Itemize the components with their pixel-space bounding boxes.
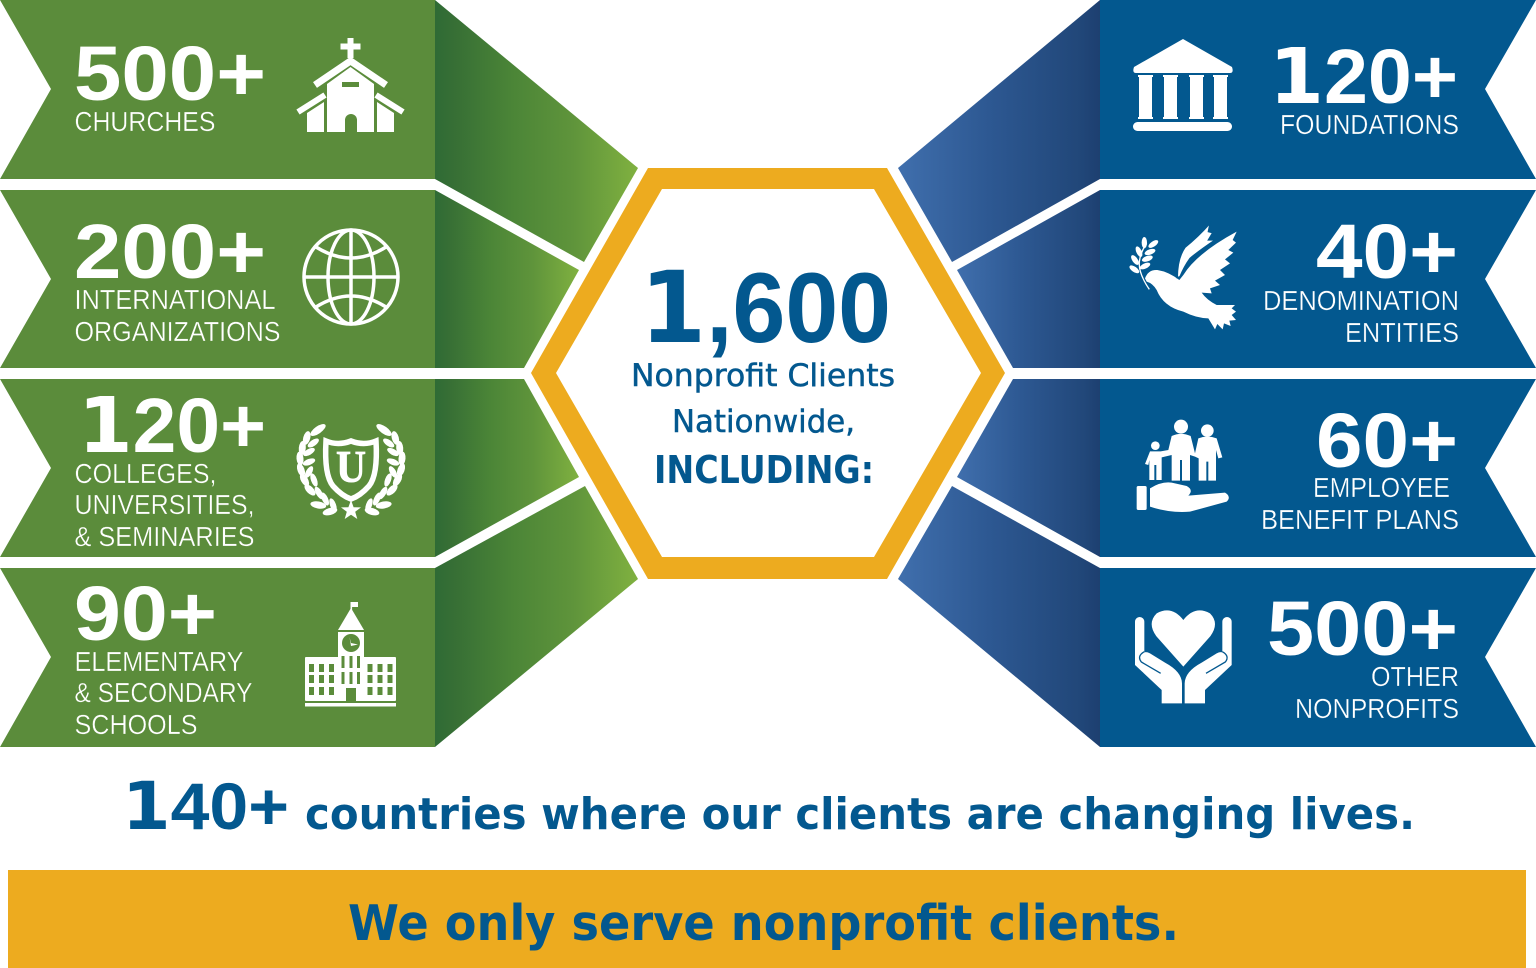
- banner: [1100, 568, 1536, 747]
- label: FOUNDATIONS: [1280, 109, 1459, 140]
- banner: bottom: We only serve nonprofit clients.: [348, 895, 1179, 952]
- countries statement: countries where our clients are changing lives.: [305, 789, 1415, 840]
- label: CHURCHES: [74, 106, 216, 137]
- banner: bottom: [8, 870, 1526, 968]
- banner: [0, 379, 435, 557]
- number: 200+: [74, 209, 266, 295]
- icon: temple: [1133, 39, 1233, 131]
- icon: church: [298, 38, 403, 132]
- fold: [898, 486, 1100, 747]
- label: NONPROFITS: [1295, 693, 1459, 724]
- icon: globe: [304, 230, 398, 324]
- number: 500+: [74, 31, 266, 117]
- label: [1263, 285, 1459, 348]
- icon: family on hand: [1137, 420, 1229, 512]
- panel: employee benefit plans: [957, 379, 1536, 557]
- banner: [0, 0, 435, 179]
- label: BENEFIT PLANS: [1261, 504, 1459, 535]
- panel: international organizations: [0, 190, 579, 368]
- label: DENOMINATION: [1263, 285, 1459, 316]
- panel: colleges: [0, 379, 579, 557]
- label: COLLEGES,: [74, 458, 216, 489]
- hexagon text: [631, 358, 895, 492]
- fold: [435, 0, 638, 262]
- label: [1295, 661, 1459, 724]
- fold: [957, 190, 1100, 368]
- panel: foundations: [898, 0, 1536, 262]
- total number: 1,600: [640, 251, 891, 366]
- number: 500+: [1267, 586, 1458, 672]
- countries statement: [122, 768, 1415, 845]
- number: 120+: [1269, 33, 1458, 122]
- panel: schools: [0, 486, 638, 747]
- hexagon text: Nationwide,: [672, 404, 855, 440]
- label: UNIVERSITIES,: [74, 489, 254, 520]
- fold: [435, 486, 638, 747]
- label: SCHOOLS: [74, 709, 198, 740]
- hexagon text: INCLUDING:: [654, 448, 874, 492]
- hexagon frame: [531, 168, 1005, 579]
- label: ELEMENTARY: [74, 646, 244, 677]
- hexagon: total clients: [531, 168, 1005, 579]
- label: ORGANIZATIONS: [74, 316, 280, 347]
- number: 90+: [74, 571, 217, 657]
- banner: [0, 190, 435, 368]
- label: OTHER: [1371, 661, 1459, 692]
- number: 60+: [1316, 398, 1458, 484]
- label: ENTITIES: [1345, 317, 1459, 348]
- number: 40+: [1316, 209, 1458, 295]
- banner: [0, 568, 435, 747]
- fold: [957, 379, 1100, 557]
- banner: [1100, 190, 1536, 368]
- label: EMPLOYEE: [1313, 472, 1450, 503]
- icon: hands holding heart: [1135, 610, 1232, 703]
- fold: [435, 379, 579, 557]
- icon: school building: [305, 602, 396, 706]
- panel: other nonprofits: [898, 486, 1536, 747]
- icon: shield and laurel: [295, 422, 407, 519]
- label: & SECONDARY: [74, 677, 252, 708]
- hexagon text: Nonprofit Clients: [631, 358, 895, 394]
- countries statement: 140+: [122, 768, 289, 845]
- fold: [898, 0, 1100, 262]
- label: [1261, 472, 1459, 535]
- icon: shield and laurel: U: [336, 441, 366, 492]
- banner: [1100, 379, 1536, 557]
- panel: churches: [0, 0, 638, 262]
- fold: [435, 190, 579, 368]
- number: 120+: [78, 382, 266, 471]
- label: & SEMINARIES: [74, 521, 254, 552]
- label: [74, 646, 252, 740]
- icon: dove: [1128, 223, 1237, 329]
- panel: denomination entities: [957, 190, 1536, 368]
- label: [74, 284, 280, 347]
- banner: [1100, 0, 1536, 179]
- label: [74, 458, 254, 552]
- label: INTERNATIONAL: [74, 284, 276, 315]
